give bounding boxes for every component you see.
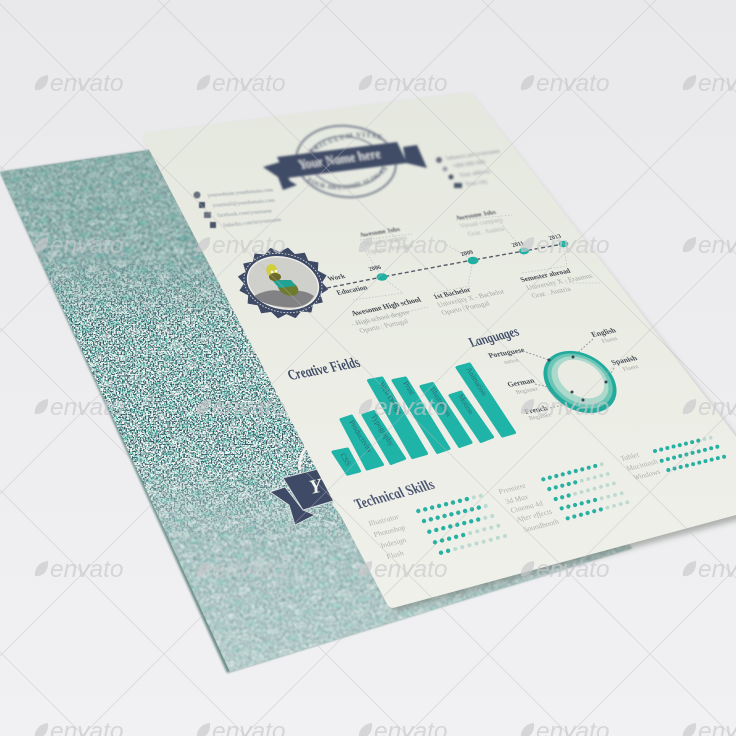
empty dots (455, 496, 505, 549)
header: name stamp and ribbon (262, 123, 428, 200)
contact list left: yourmail@yourdomain.com (212, 198, 276, 209)
watermark row 3 (35, 394, 736, 421)
ribbon (263, 142, 427, 190)
bar: Print (393, 378, 449, 452)
education 3: University X - Erasmus (525, 272, 594, 292)
empty dots (704, 438, 711, 439)
creative fields heading: Creative Fields (284, 355, 364, 384)
years: 2009 (460, 250, 475, 258)
timeline nodes (376, 241, 568, 281)
filled dots (543, 466, 601, 518)
skills group 2 (495, 464, 627, 534)
language labels: English (589, 326, 618, 339)
skill labels (365, 512, 408, 561)
bird (264, 263, 301, 299)
education 1: Oporto : Portugal (358, 318, 410, 335)
watermark row 4 (35, 556, 736, 583)
stamp ring (294, 123, 398, 200)
watermark row 1: envato (374, 70, 448, 97)
back sheet ribbon: Y (307, 474, 326, 499)
contact list left (194, 187, 283, 229)
rock (254, 290, 314, 308)
skill labels: Windows (631, 467, 662, 482)
education 2: Oporto | Portugal (440, 300, 491, 317)
back sheet ribbon (270, 468, 336, 525)
watermark row 2: envato (374, 232, 448, 259)
language labels: German (505, 376, 537, 389)
filled dots (418, 499, 479, 553)
watermark row 1: envato (536, 70, 610, 97)
language labels: French (522, 404, 550, 416)
skill labels: Flash (383, 549, 406, 561)
bar: Typography (363, 412, 404, 464)
languages ring chart (486, 326, 640, 426)
years (368, 234, 563, 273)
stamp ring: YOUR AWESOME SLOGAN (307, 166, 388, 191)
work 1: Awesome Jobs (359, 226, 402, 239)
row labels: Work (326, 272, 347, 283)
stitched ring (238, 245, 328, 321)
timeline: Education (335, 284, 369, 297)
watermark row 5 (35, 718, 736, 736)
watermark row 3: envato (212, 394, 286, 421)
profile badge (234, 242, 332, 324)
years: 2013 (548, 234, 563, 242)
language labels (486, 326, 640, 422)
back sheet stamp ring (300, 440, 346, 520)
watermark row 2 (35, 232, 736, 259)
watermark row 1: envato (50, 70, 124, 97)
ring markers (548, 356, 608, 402)
bar: Illustration (421, 384, 471, 446)
watermark row 1 (35, 70, 736, 97)
skill labels (618, 450, 662, 482)
work 2 (455, 209, 506, 238)
skill labels: Tablet (618, 450, 642, 463)
skill labels: Illustrator (365, 512, 402, 528)
front sheet shadow (146, 96, 736, 612)
watermark row 4: envato (50, 556, 124, 583)
language labels: Fluent (600, 335, 619, 345)
skill labels: Soundbooth (521, 517, 561, 534)
work 1 (359, 226, 415, 256)
skill labels: Indesign (377, 536, 408, 550)
stamp ring: CURRICULUM VITAE (306, 131, 383, 154)
contact list left: yourwebsite.yourdomain.com (207, 187, 275, 199)
bar labels: CSS (338, 451, 353, 467)
watermark row 2: envato (536, 232, 610, 259)
skill labels: After effects (513, 507, 554, 524)
language labels: Portuguese (486, 345, 527, 360)
front sheet (143, 92, 736, 608)
ribbon: Your Name here (296, 147, 384, 172)
empty dots (575, 464, 627, 508)
languages heading: Languages (464, 325, 523, 351)
years: 2011 (511, 241, 525, 249)
bar labels (338, 365, 489, 467)
bar labels: Productivity (347, 418, 375, 455)
contact list right: behance.net/yourname (445, 149, 502, 162)
watermark row 3: envato (50, 394, 124, 421)
watermark row 2: envato (212, 232, 286, 259)
language labels: Fluent (621, 363, 640, 373)
years: 2006 (368, 265, 383, 273)
language labels: Beginner (527, 412, 553, 422)
bar labels: Animation (464, 365, 489, 397)
language labels: native (502, 357, 521, 366)
education 2 (432, 286, 507, 317)
work 2: Graz . Austria (467, 226, 506, 238)
skills group 3 (618, 438, 724, 482)
bar labels: Motion (456, 392, 476, 416)
work 2: Awesome Jobs (455, 209, 498, 222)
watermark row 4: envato (374, 556, 448, 583)
contact list left: linkedin.com/in/yourname (222, 217, 283, 229)
language labels: Beginner (514, 386, 540, 396)
work 2: Virtual company (459, 217, 506, 230)
education 2: University X - Bachelor (436, 288, 507, 309)
timeline line (327, 244, 563, 288)
watermark row 3: envato (374, 394, 448, 421)
watermark row 4: envato (212, 556, 286, 583)
bar: Web design (368, 378, 426, 458)
watermark row 4: envato (536, 556, 610, 583)
language labels: Spanish (609, 353, 640, 367)
education 3: Semester abroad (519, 267, 572, 284)
education 3: Graz . Austria (530, 285, 573, 300)
bar labels: Print (401, 379, 417, 397)
skill labels (495, 481, 561, 534)
connectors (352, 215, 600, 325)
scalloped frame (234, 242, 332, 324)
education 1 (349, 295, 424, 335)
photo (242, 250, 324, 316)
bar labels: Web Design (377, 380, 405, 416)
education 1: Awesome High school (349, 295, 424, 318)
skill labels: Photoshop (370, 523, 407, 539)
skills group 1 (365, 496, 505, 561)
skill labels: Cinema 4d (508, 499, 545, 515)
bar chart (333, 364, 514, 474)
speckled pattern (0, 150, 632, 672)
ring (532, 338, 628, 426)
contact list left: facebook.com/yourname (216, 207, 274, 219)
watermark row 2: envato (50, 232, 124, 259)
back sheet with pattern (0, 148, 632, 674)
education 1: High school degree (354, 308, 411, 327)
bar: Motion (450, 392, 492, 442)
technical skills heading: Technical Skills (350, 477, 439, 512)
bar: Animation (457, 364, 514, 436)
skill labels: Premiere (495, 481, 528, 496)
contact list right: Your city (464, 179, 490, 188)
work 1: Oporto : Portugal (367, 242, 415, 256)
bar labels: Illustration (428, 385, 454, 418)
contact list right: +000 000 000 (451, 160, 487, 170)
contact list right: Your address (458, 169, 492, 179)
filled dots (655, 441, 724, 470)
bar: Productivity (341, 416, 382, 469)
bar: CSS (333, 449, 360, 474)
education 3 (519, 267, 594, 300)
watermark row 1: envato (212, 70, 286, 97)
watermark row 3: envato (536, 394, 610, 421)
work 1: Virtual company (363, 235, 410, 248)
skill labels: 3d Max (502, 492, 531, 506)
education 2: 1st Bachelor (432, 286, 473, 301)
timeline (326, 209, 600, 335)
skill labels: Macintosh (623, 457, 660, 473)
connectors (526, 339, 614, 408)
contact list right (436, 149, 502, 188)
bar labels: Typography (369, 412, 396, 448)
